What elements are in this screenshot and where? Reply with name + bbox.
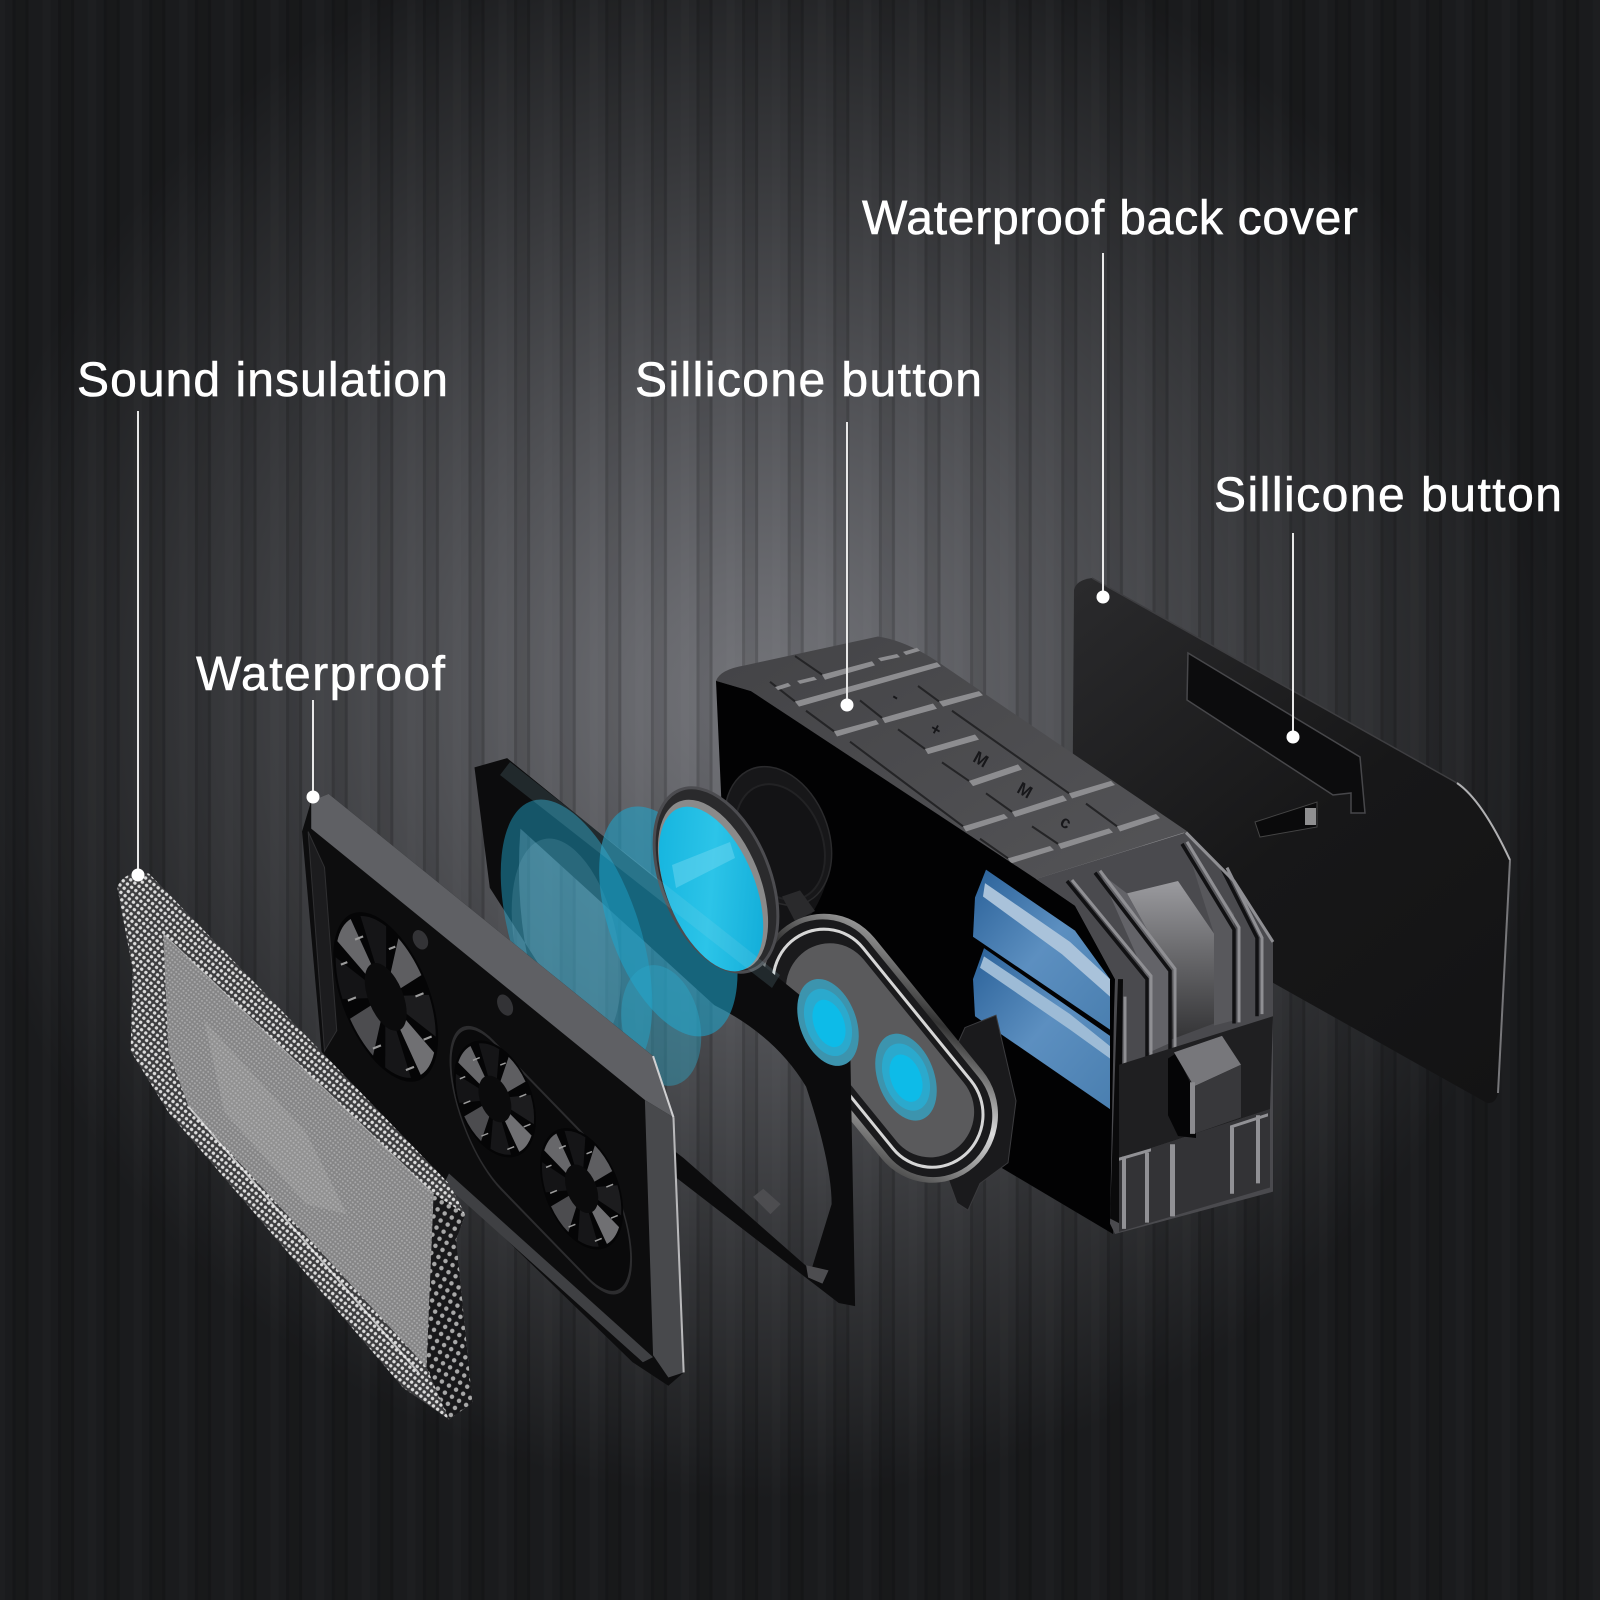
button slot in back cover — [1187, 653, 1365, 813]
right end cap with ribs — [1036, 833, 1273, 1234]
top face with button strip — [716, 636, 1234, 979]
top bevel — [311, 794, 673, 1117]
large woofer driver — [500, 762, 802, 990]
bottom ribbed section — [1119, 1109, 1270, 1232]
mounting holes — [410, 928, 431, 952]
driver front ring — [630, 770, 802, 990]
blue cone — [638, 792, 784, 986]
label: sillicone button (top) with leader — [635, 354, 982, 712]
button symbols: c — [1057, 811, 1075, 834]
silicone button tab — [1255, 802, 1317, 837]
waterproof front panel — [302, 794, 684, 1386]
button symbols: - — [889, 686, 904, 707]
middle gasket frame with transparent discs — [471, 758, 855, 1306]
frame shape — [474, 758, 855, 1306]
middle band — [1119, 1016, 1273, 1159]
label: waterproof back cover with leader: Waterproof back cover — [862, 192, 1358, 245]
transparent disc inner — [494, 828, 639, 1059]
button symbols — [889, 686, 1075, 834]
panel body — [302, 794, 684, 1386]
tweeter racetrack body — [731, 886, 1025, 1211]
central fine weave — [163, 934, 434, 1367]
oval recess with two fan grilles — [438, 994, 640, 1327]
lower bevel — [444, 1173, 653, 1362]
label: waterproof with leader: Waterproof — [196, 648, 446, 701]
tweeter blue domes — [786, 969, 948, 1130]
blue dome 2 — [864, 1024, 948, 1130]
chrome rim — [731, 886, 1025, 1211]
label: sound insulation with leader — [77, 354, 448, 882]
label: sillicone button (back) with leader: Sillicone button — [1214, 469, 1562, 522]
transparent disc medium — [572, 788, 765, 1055]
frame reflection over cone — [500, 762, 780, 988]
transparent disc small — [611, 958, 712, 1093]
side latch — [1168, 1036, 1241, 1138]
grey diaphragm — [768, 925, 992, 1176]
fan grille 1 — [312, 897, 460, 1096]
speaker main body — [716, 636, 1273, 1234]
back cover plate — [1072, 578, 1510, 1103]
battery cells — [973, 870, 1110, 1109]
label: sillicone button (back) with leader — [1214, 469, 1562, 744]
mesh sound insulation — [117, 872, 472, 1419]
button symbols: + — [927, 718, 945, 741]
blue dome 1 — [786, 969, 870, 1075]
left edge detail — [308, 832, 337, 1051]
side clips — [925, 1015, 1016, 1210]
woofer rear magnet housing — [705, 751, 851, 950]
label: sound insulation with leader: Sound insulation — [77, 354, 448, 407]
front opening, black interior — [716, 681, 1119, 1234]
label: sillicone button (top) with leader: Sillicone button — [635, 354, 982, 407]
button symbols: M — [970, 747, 992, 772]
dark corner of mesh — [427, 1194, 472, 1419]
right bevel — [645, 1100, 684, 1378]
transparent disc large — [471, 781, 682, 1096]
label: waterproof with leader — [196, 648, 446, 804]
label: waterproof back cover with leader — [862, 192, 1358, 604]
button symbols: M — [1014, 778, 1036, 803]
